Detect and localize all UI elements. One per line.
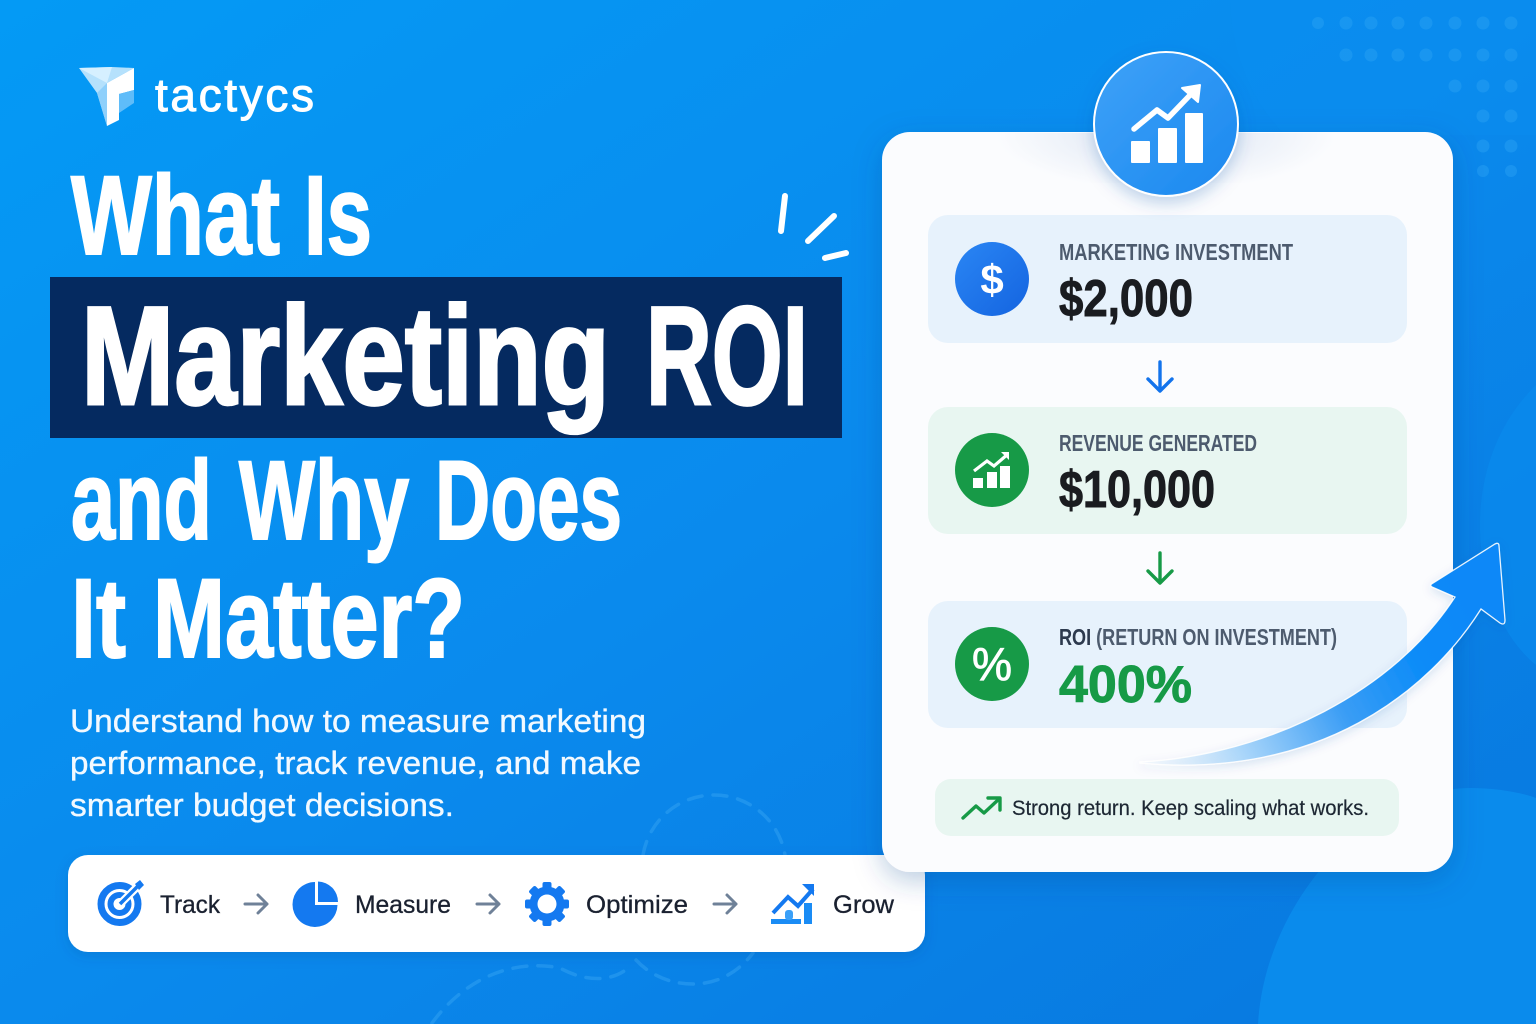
title line: and Why Does	[71, 438, 622, 563]
process pill: Track, Measure, Optimize, Grow	[68, 855, 925, 952]
icon: dollar	[955, 242, 1029, 316]
arrow: rising growth	[1140, 543, 1505, 765]
label: Measure: Measure	[355, 891, 451, 919]
title line: What Is: Is	[304, 153, 372, 278]
icon: growth chart	[771, 884, 814, 924]
callout: strong return	[935, 779, 1399, 836]
arrow	[245, 895, 267, 913]
value: 400%	[1059, 656, 1192, 714]
title line: and Why Does: Why	[239, 438, 409, 563]
logo wordmark: tactycs	[155, 69, 314, 121]
row: revenue generated	[928, 407, 1407, 534]
icon: T mark	[79, 67, 134, 126]
panel: ROI card	[882, 132, 1453, 872]
subtitle: performance, track revenue, and make	[70, 745, 641, 781]
label: Grow: Grow	[833, 891, 895, 919]
title highlight: Marketing ROI: ROI	[646, 277, 808, 434]
row: marketing investment	[928, 215, 1407, 343]
icon: target	[101, 880, 144, 922]
row: ROI	[928, 601, 1407, 728]
icon: green chart	[955, 433, 1029, 507]
icon: trend arrow	[963, 798, 1000, 818]
callout text: Strong return. Keep scaling what works.	[1012, 797, 1369, 820]
badge: chart circle	[1094, 52, 1238, 196]
icon: percent	[955, 627, 1029, 701]
icon: pie chart	[293, 882, 338, 927]
label: REVENUE GENERATED	[1059, 430, 1257, 456]
subtitle: Understand how to measure marketing	[70, 703, 646, 739]
title line: and Why Does: Does	[435, 438, 622, 563]
subtitle	[70, 703, 646, 823]
icon: dollar: $	[980, 256, 1004, 303]
icon: gear	[525, 882, 569, 926]
title line: It Matter?	[71, 556, 465, 681]
subtitle: smarter budget decisions.	[70, 787, 454, 823]
arrow	[477, 895, 499, 913]
title highlight: Marketing ROI: Marketing	[81, 277, 610, 434]
label: MARKETING INVESTMENT	[1059, 239, 1293, 265]
label: ROI (RETURN ON INVESTMENT)	[1059, 624, 1337, 650]
title line: It Matter?: Matter?	[153, 556, 465, 681]
arrow: down green	[1148, 553, 1172, 583]
title line: It Matter?: It	[71, 556, 126, 681]
arrow: down blue	[1148, 362, 1172, 391]
label: Track: Track	[160, 891, 220, 919]
arrow	[714, 895, 736, 913]
value: $10,000	[1059, 461, 1215, 519]
title line: and Why Does: and	[71, 438, 212, 563]
icon: percent: %	[972, 638, 1012, 690]
label: Optimize: Optimize	[586, 891, 688, 919]
sparkle accent	[781, 196, 846, 258]
value: $2,000	[1059, 270, 1193, 328]
logo: tactycs	[79, 67, 314, 126]
title line: What Is: What	[71, 153, 280, 278]
